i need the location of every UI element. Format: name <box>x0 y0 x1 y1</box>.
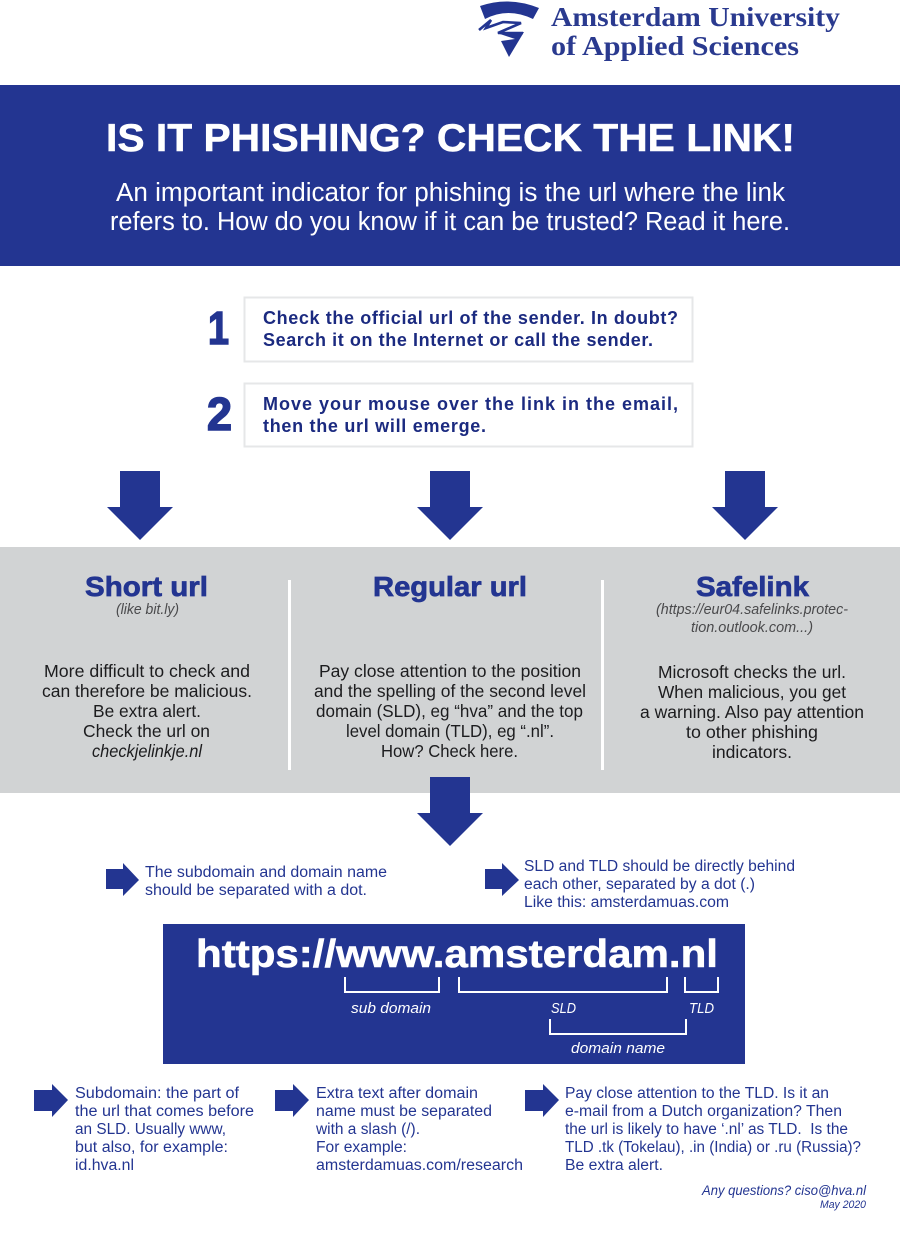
note: SLD and TLD behind each other: each other, separated by a dot (.) <box>524 876 755 893</box>
note: subdomain explanation: the url that comes before <box>75 1103 254 1120</box>
note: subdomain and domain separated: should be separated with a dot. <box>145 882 367 899</box>
subheading: safelink url: (https://eur04.safelinks.protec- <box>656 602 848 618</box>
example url: https://www.amsterdam.nl <box>196 933 718 976</box>
short url description <box>42 661 252 761</box>
note: subdomain explanation: but also, for example: <box>75 1139 228 1156</box>
bracket: domain name <box>550 1019 686 1034</box>
safelink description: Microsoft checks the url. <box>658 662 846 682</box>
heading: safelink: Safelink <box>696 571 809 602</box>
intro line 1: An important indicator for phishing is the url where the link <box>116 179 785 207</box>
short url description: can therefore be malicious. <box>42 681 252 701</box>
note: extra text after domain name: amsterdamuas.com/research <box>316 1157 523 1174</box>
note: extra text after domain name: For example: <box>316 1139 407 1156</box>
note: pay attention to the TLD: Pay close attention to the TLD. Is it an <box>565 1085 829 1102</box>
note: subdomain explanation: an SLD. Usually www, <box>75 1121 226 1138</box>
logo name line 1: Amsterdam University <box>551 2 841 32</box>
column: regular url <box>314 571 586 761</box>
note: subdomain and domain separated <box>106 863 387 899</box>
note: subdomain explanation <box>34 1084 254 1174</box>
icon: arrow <box>106 863 139 896</box>
note: extra text after domain name: name must be separated <box>316 1103 492 1120</box>
bracket: SLD <box>459 977 667 992</box>
regular url description: How? Check here. <box>381 741 518 761</box>
panel: url types <box>0 547 900 793</box>
short url description: Be extra alert. <box>93 701 201 721</box>
arrow: down to safelink <box>712 471 778 540</box>
note: subdomain and domain separated: The subdomain and domain name <box>145 864 387 881</box>
label: sub domain: sub domain <box>351 1000 431 1017</box>
regular url description: and the spelling of the second level <box>314 681 586 701</box>
note: SLD and TLD behind each other: SLD and TLD should be directly behind <box>524 858 795 875</box>
note: pay attention to the TLD <box>525 1084 861 1174</box>
regular url description: Pay close attention to the position <box>319 661 581 681</box>
subheading: safelink url: tion.outlook.com...) <box>691 620 813 636</box>
step 1 line 2: Search it on the Internet or call the sender. <box>263 330 653 350</box>
arrow: down to short url <box>107 471 173 540</box>
safelink description: When malicious, you get <box>658 682 846 702</box>
step 1 line 1: Check the official url of the sender. In doubt? <box>263 308 678 328</box>
short url description: Check the url on <box>83 721 210 741</box>
panel: header banner <box>0 85 900 266</box>
intro line 2: refers to. How do you know if it can be trusted? Read it here. <box>110 208 790 236</box>
note: extra text after domain name: Extra text after domain <box>316 1085 478 1102</box>
panel: url anatomy <box>163 924 745 1064</box>
step 1 <box>208 298 692 362</box>
subheading: safelink url <box>656 602 848 636</box>
icon: arrow <box>525 1084 559 1117</box>
note: subdomain explanation: id.hva.nl <box>75 1157 134 1174</box>
note: SLD and TLD behind each other: Like this: amsterdamuas.com <box>524 894 729 911</box>
icon: university emblem <box>479 1 539 57</box>
logo name line 2: of Applied Sciences <box>551 31 799 61</box>
note: extra text after domain name: with a slash (/). <box>315 1121 420 1138</box>
date: May 2020 <box>820 1199 867 1211</box>
safelink description: indicators. <box>712 742 792 762</box>
label: domain name: domain name <box>571 1040 665 1057</box>
step number 1: 1 <box>208 302 229 354</box>
heading: regular url: Regular url <box>373 571 527 602</box>
note: pay attention to the TLD: Be extra alert. <box>565 1157 663 1174</box>
bracket: sub domain <box>345 977 439 992</box>
note: pay attention to the TLD: the url is likely to have ‘.nl’ as TLD. Is the <box>565 1121 848 1138</box>
bracket: TLD <box>685 977 718 992</box>
note: pay attention to the TLD: e-mail from a Dutch organization? Then <box>565 1103 842 1120</box>
column: safelink <box>640 571 864 762</box>
regular url description: domain (SLD), eg “hva” and the top <box>316 701 583 721</box>
safelink description: a warning. Also pay attention <box>640 702 864 722</box>
step 2 <box>207 384 692 446</box>
note: SLD and TLD behind each other <box>485 858 795 911</box>
note: pay attention to the TLD: TLD .tk (Tokelau), .in (India) or .ru (Russia)? <box>565 1139 861 1156</box>
regular url description: level domain (TLD), eg “.nl”. <box>346 721 554 741</box>
title: IS IT PHISHING? CHECK THE LINK! <box>106 117 795 160</box>
contact line: Any questions? ciso@hva.nl <box>701 1182 867 1198</box>
step box 1 <box>244 298 692 362</box>
icon: arrow <box>485 863 519 896</box>
label: SLD: SLD <box>551 1000 576 1017</box>
step 2 line 2: then the url will emerge. <box>263 416 486 436</box>
short url description: checkjelinkje.nl <box>92 741 203 761</box>
safelink description <box>640 662 864 762</box>
step number 2: 2 <box>207 388 232 440</box>
heading: short url: Short url <box>85 571 208 602</box>
safelink description: to other phishing <box>686 722 818 742</box>
note: subdomain explanation: Subdomain: the part of <box>75 1085 240 1102</box>
short url description: More difficult to check and <box>44 661 250 681</box>
note: extra text after domain name <box>275 1084 523 1174</box>
step 2 line 1: Move your mouse over the link in the email, <box>263 394 678 414</box>
label: TLD: TLD <box>689 1000 714 1017</box>
icon: arrow <box>34 1084 68 1117</box>
arrow: down to url explanation <box>417 777 483 846</box>
icon: arrow <box>275 1084 309 1117</box>
step box 2 <box>244 384 692 446</box>
arrow: down to regular url <box>417 471 483 540</box>
regular url description <box>314 661 586 761</box>
subheading: like bit.ly: (like bit.ly) <box>116 602 179 618</box>
column: short url <box>42 571 252 761</box>
logo: Amsterdam University of Applied Sciences <box>479 1 841 61</box>
